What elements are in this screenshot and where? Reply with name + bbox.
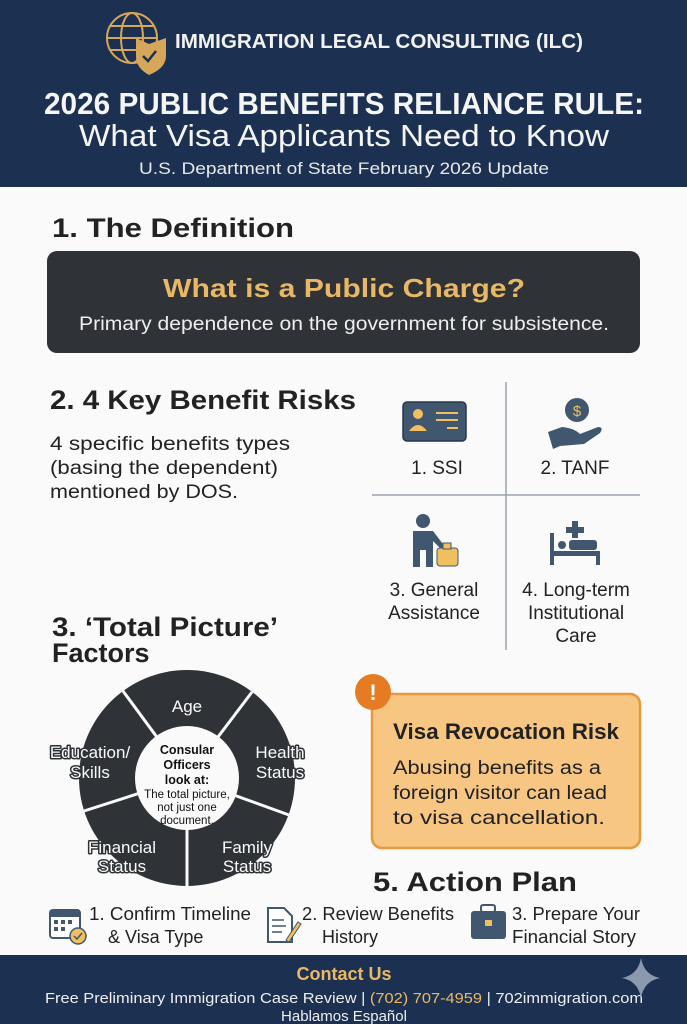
title: What Visa Applicants Need to Know xyxy=(79,118,610,153)
action step 1: 1. Confirm Timeline xyxy=(89,904,251,924)
icon: document pen xyxy=(268,908,301,942)
label: SSI: 1. SSI xyxy=(411,458,463,479)
callout: visa revocation risk: foreign visitor can lead xyxy=(393,783,607,804)
chart: total picture wheel: Age xyxy=(172,697,202,716)
text: center note xyxy=(144,743,230,827)
action step 2: 2. Review Benefits xyxy=(302,904,454,924)
chart: total picture wheel: Education/ xyxy=(50,743,130,762)
text: center note: document. xyxy=(160,815,214,827)
label: Long-term Institutional Care: 4. Long-term xyxy=(522,580,630,601)
icon: sparkle xyxy=(622,958,660,998)
title xyxy=(44,86,644,153)
footer: contact xyxy=(0,955,687,1024)
label: General Assistance: 3. General xyxy=(390,580,478,601)
title: 2026 PUBLIC BENEFITS RELIANCE RULE: xyxy=(44,86,644,121)
footer: contact: Contact Us xyxy=(296,964,392,984)
icon: hand with coin xyxy=(548,398,602,449)
icon: hospital bed xyxy=(550,521,600,565)
label: General Assistance xyxy=(388,580,480,624)
chart: total picture wheel: Financial xyxy=(88,838,156,857)
action step 2 xyxy=(268,904,454,947)
chart: total picture wheel xyxy=(50,670,305,890)
text block: benefit description: 4 specific benefits types xyxy=(50,434,290,455)
text block: benefit description: (basing the dependent) xyxy=(50,458,278,479)
action step 3: Financial Story xyxy=(512,927,636,947)
label: Long-term Institutional Care: Institutional xyxy=(528,603,624,624)
panel: public charge definition: Primary dependence on the government for subsistence. xyxy=(79,314,609,335)
header xyxy=(0,0,687,187)
heading: 3. Total Picture Factors xyxy=(52,612,278,668)
subtitle: U.S. Department of State February 2026 Update xyxy=(139,159,549,178)
text: center note: not just one xyxy=(157,802,217,814)
heading: 3. Total Picture Factors: 3. ‘Total Picture’ xyxy=(52,612,278,642)
icon: exclamation: ! xyxy=(369,680,377,705)
text: center note: Consular xyxy=(160,743,214,757)
icon: briefcase xyxy=(471,905,506,939)
icon: calendar xyxy=(50,910,86,944)
callout: visa revocation risk: to visa cancellation. xyxy=(393,808,605,829)
label: TANF: 2. TANF xyxy=(541,458,609,479)
label: Long-term Institutional Care xyxy=(522,580,630,647)
heading: 3. Total Picture Factors: Factors xyxy=(52,638,150,668)
icon: globe shield logo xyxy=(107,13,166,75)
org name: IMMIGRATION LEGAL CONSULTING (ILC) xyxy=(175,31,583,53)
text: center note: Officers xyxy=(163,758,211,772)
text block: benefit description: mentioned by DOS. xyxy=(50,482,238,503)
icon: exclamation xyxy=(355,674,391,710)
callout: visa revocation risk: Visa Revocation Risk xyxy=(393,719,620,744)
text: center note: look at: xyxy=(165,773,209,787)
footer: contact: Free Preliminary Immigration Case Review | (702) 707-4959 | 702immigration.com xyxy=(45,990,643,1007)
action step 3 xyxy=(471,904,640,947)
chart: total picture wheel: Status xyxy=(223,857,271,876)
chart: total picture wheel: Skills xyxy=(70,763,110,782)
callout: visa revocation risk xyxy=(355,674,640,848)
panel: public charge definition: What is a Public Charge? xyxy=(163,273,525,303)
chart: total picture wheel: Family xyxy=(222,838,273,857)
heading: 2. 4 Key Benefit Risks: 2. 4 Key Benefit Risks xyxy=(50,385,356,415)
heading: 5. Action Plan: 5. Action Plan xyxy=(373,867,577,897)
icon: person with bag xyxy=(413,514,458,567)
label: General Assistance: Assistance xyxy=(388,603,480,624)
panel: public charge definition xyxy=(47,251,640,353)
action step 2: History xyxy=(322,927,378,947)
label: Long-term Institutional Care: Care xyxy=(555,626,597,647)
action step 3: 3. Prepare Your xyxy=(512,904,640,924)
heading: 1. The Definition: 1. The Definition xyxy=(52,213,294,243)
action step 1: & Visa Type xyxy=(108,927,203,947)
text: center note: The total picture, xyxy=(144,789,230,801)
action step 1 xyxy=(50,904,251,947)
chart: total picture wheel: Health xyxy=(255,743,305,762)
chart: total picture wheel: Status xyxy=(98,857,146,876)
chart: total picture wheel: Status xyxy=(256,763,304,782)
text block: benefit description xyxy=(50,434,290,503)
icon: ID card xyxy=(403,402,466,441)
callout: visa revocation risk: Abusing benefits as a xyxy=(393,758,601,779)
icon: hand with coin: $ xyxy=(573,403,582,420)
panel: benefit grid xyxy=(372,382,640,650)
